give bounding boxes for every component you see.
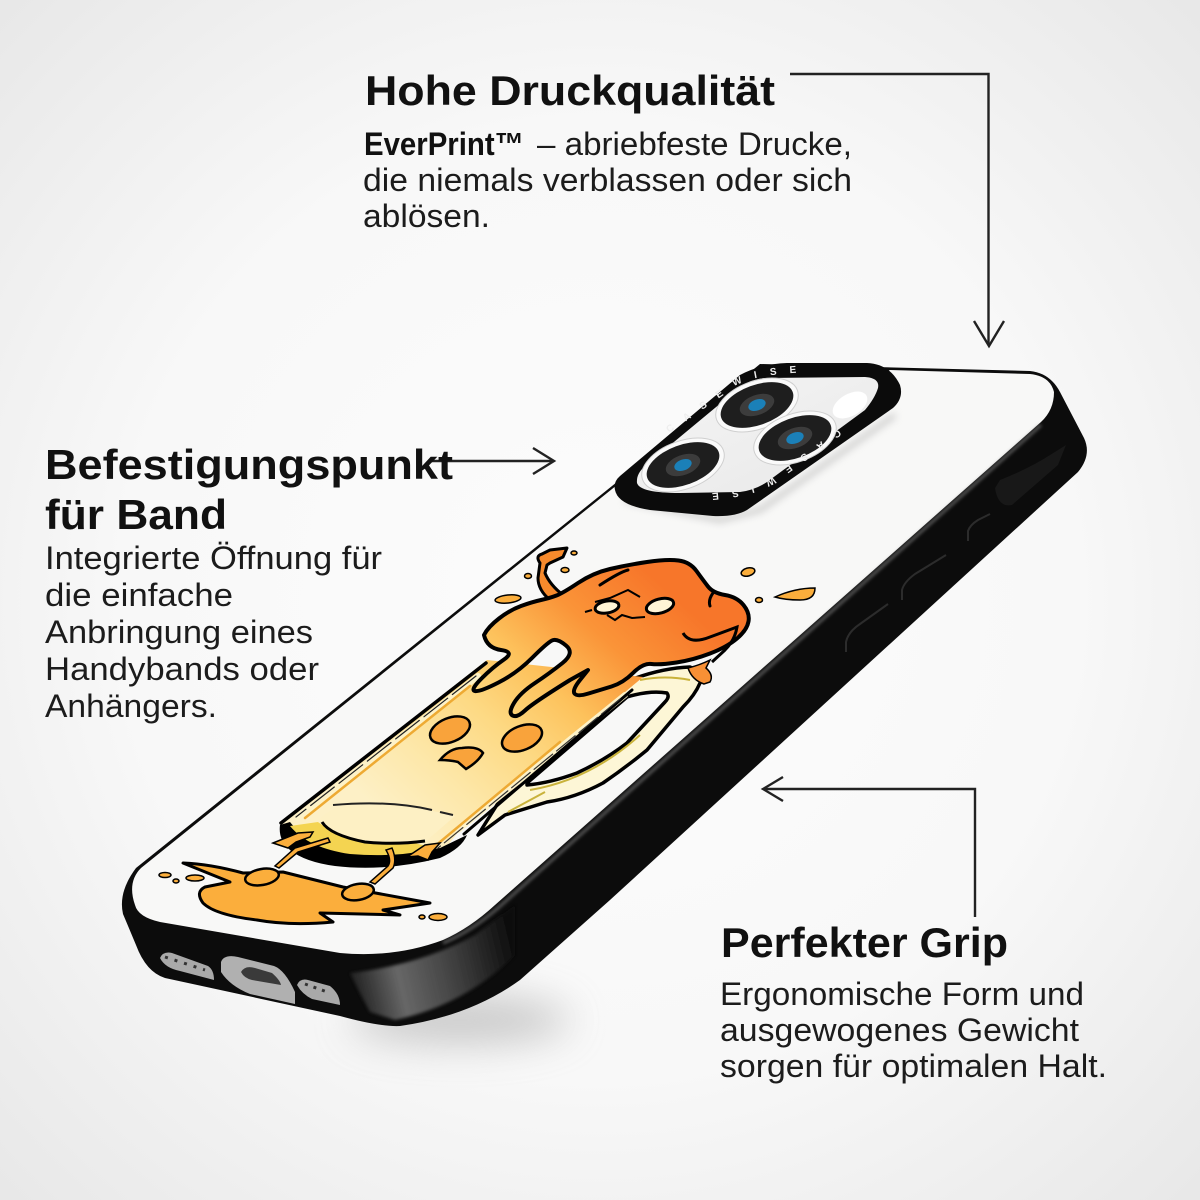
- handle detail: [508, 678, 690, 812]
- case body: [122, 364, 1087, 1026]
- face bevel: [443, 425, 1041, 943]
- side buttons: [846, 445, 1066, 652]
- body text: EverPrint™: [364, 126, 524, 162]
- body text: Handybands oder: [45, 651, 319, 687]
- heading: Hohe Druckqualität: [365, 67, 775, 114]
- lens right: [746, 401, 844, 475]
- foam arm: [538, 548, 567, 600]
- body text: Integrierte Öffnung für: [45, 540, 382, 576]
- foam face: [585, 590, 737, 662]
- phone shadow: [350, 996, 570, 1044]
- camera island: [614, 363, 902, 526]
- heading: Befestigungspunkt: [45, 441, 453, 488]
- right speaker: [297, 980, 340, 1005]
- body text: [720, 976, 1107, 1084]
- text block: grip: [720, 919, 1107, 1084]
- text block: strap attachment: [45, 441, 453, 724]
- lens left: [634, 428, 732, 502]
- lens top: [708, 368, 806, 442]
- beer illustration: [159, 548, 815, 924]
- body text: [45, 540, 382, 724]
- lens window: [637, 377, 878, 493]
- body text: Anhängers.: [45, 688, 217, 724]
- left speaker: [160, 953, 214, 980]
- glass edges: [281, 663, 632, 852]
- legs and feet: [244, 832, 440, 903]
- bubbles: [426, 711, 546, 769]
- arrow: print quality: [790, 74, 1004, 346]
- puddle: [183, 863, 430, 924]
- body text: die niemals verblassen oder sich: [363, 162, 852, 198]
- arrow: strap attachment: [430, 448, 554, 474]
- body text: [363, 126, 852, 234]
- island shadow: [625, 415, 895, 520]
- camera island: CASEWISE: [712, 430, 840, 500]
- handle: [478, 667, 701, 835]
- glass: [280, 660, 643, 866]
- body text: die einfache: [45, 577, 233, 613]
- heading: für Band: [45, 491, 227, 538]
- heading: [45, 441, 453, 538]
- brand text: [669, 371, 832, 433]
- body text: Ergonomische Form und: [720, 976, 1084, 1012]
- heading: Perfekter Grip: [721, 919, 1008, 966]
- flash: [828, 386, 872, 424]
- body text: sorgen für optimalen Halt.: [720, 1048, 1107, 1084]
- body text: – abriebfeste Drucke,: [537, 126, 852, 162]
- arrow: grip: [763, 777, 975, 917]
- foam crease: [600, 570, 713, 606]
- phone case: [122, 364, 1087, 1026]
- charging port: [221, 956, 295, 1004]
- splashes: [159, 551, 815, 920]
- back face: [132, 370, 1054, 954]
- hand on handle: [688, 660, 711, 684]
- text block: print quality: [363, 67, 852, 234]
- body text: Anbringung eines: [45, 614, 313, 650]
- camera island: CASEWISE: [666, 366, 796, 432]
- island frame: [615, 363, 901, 516]
- corner highlight: [350, 905, 515, 1020]
- body text: ausgewogenes Gewicht: [720, 1012, 1079, 1048]
- foam: [473, 560, 749, 716]
- glass base: [280, 803, 467, 868]
- body text: ablösen.: [363, 198, 490, 234]
